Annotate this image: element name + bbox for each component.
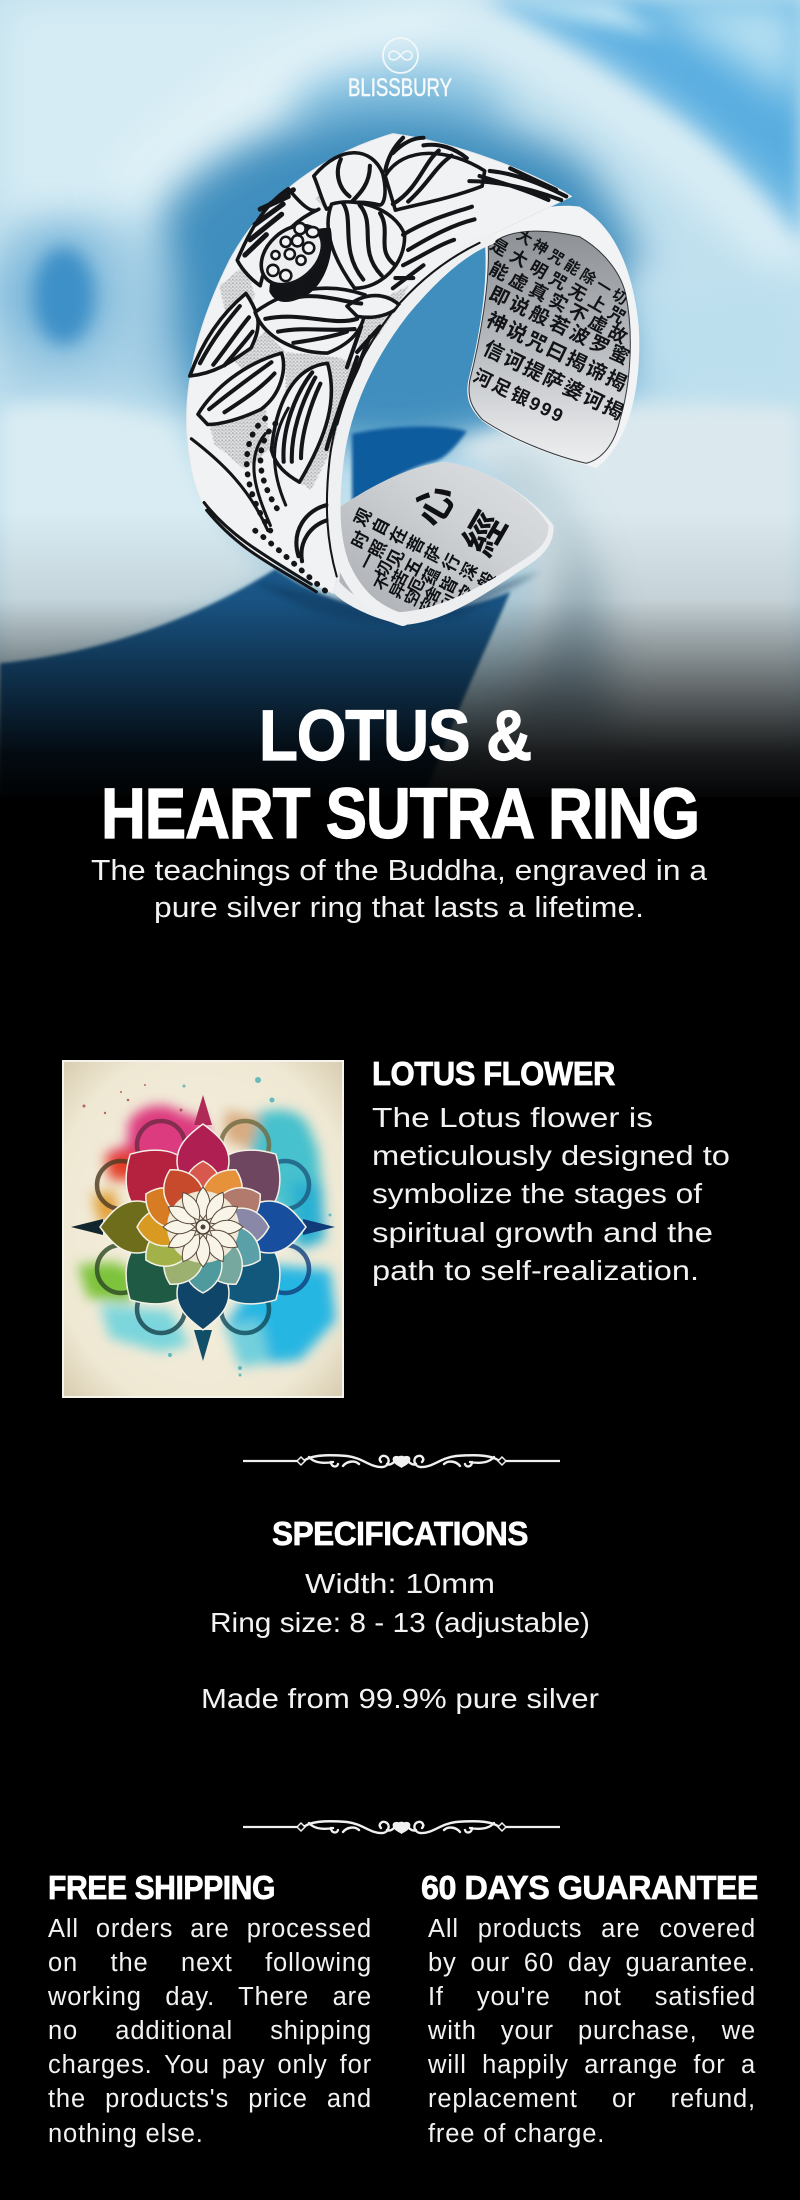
- guarantee text: replacement or refund,: [428, 2085, 756, 2113]
- mandala petals: [100, 1124, 306, 1330]
- guarantee text: will happily arrange for a: [428, 2051, 756, 2079]
- free shipping text: nothing else.: [48, 2120, 204, 2148]
- guarantee text: If you're not satisfied: [428, 1983, 756, 2011]
- lotus flower description: path to self-realization.: [372, 1255, 699, 1286]
- subtitle: The teachings of the Buddha, engraved in a: [91, 855, 708, 887]
- guarantee text: with your purchase, we: [428, 2017, 756, 2045]
- ring bottom tab with engraved characters: 时照见五蕴皆空度: [346, 525, 500, 619]
- free shipping text: charges. You pay only for: [48, 2051, 372, 2079]
- guarantee heading: 60 DAYS GUARANTEE: [421, 1869, 758, 1906]
- lotus flower petals: [190, 153, 485, 482]
- logo: Blissbury: [348, 38, 452, 102]
- lotus mandala watercolor picture: [62, 1060, 344, 1398]
- specifications list: Ring size: 8 - 13 (adjustable): [210, 1607, 590, 1638]
- lotus flower heading: LOTUS FLOWER: [372, 1055, 616, 1092]
- seed pod: [250, 214, 334, 302]
- ornamental divider: [243, 1455, 560, 1468]
- mandala picture frame: [63, 1061, 343, 1397]
- hero photo: blue draped cloth background: [0, 0, 800, 806]
- ring bottom tab with engraved characters: 心經: [401, 468, 531, 578]
- free shipping text: [48, 1915, 372, 2148]
- ring inner face with engraved sutra: 即说般若波罗蜜: [486, 282, 633, 370]
- lotus flower description: meticulously designed to: [372, 1140, 730, 1171]
- title: [101, 697, 699, 854]
- outer ink spikes: [71, 1095, 335, 1361]
- free shipping text: no additional shipping: [48, 2017, 372, 2045]
- ring bottom tab with engraved characters: 观自在菩萨行深般若: [349, 502, 520, 606]
- free shipping text: the products's price and: [48, 2085, 372, 2113]
- guarantee text: [428, 1915, 756, 2148]
- paint spatter: [82, 1084, 182, 1114]
- ring outer band: [187, 134, 571, 593]
- ring inner face with engraved sutra: 是大明咒无上咒: [487, 234, 629, 328]
- engraved stipple shading: [209, 172, 408, 490]
- logo: Blissbury: BLISSBURY: [348, 74, 452, 102]
- specifications list: Width: 10mm: [305, 1568, 495, 1599]
- ring inner face with engraved sutra: 能虚真实不虚故: [486, 257, 631, 348]
- ring soft contact shadow: [255, 571, 541, 624]
- lotus flower description: spiritual growth and the: [372, 1217, 713, 1248]
- subtitle: pure silver ring that lasts a lifetime.: [154, 892, 644, 924]
- lotus flower description: [372, 1102, 730, 1286]
- specifications list: [201, 1568, 599, 1714]
- title: HEART SUTRA RING: [101, 775, 699, 854]
- ring inner face with engraved sutra: 神说咒曰揭谛揭: [482, 308, 630, 396]
- free shipping text: on the next following: [48, 1949, 372, 1977]
- free shipping heading: FREE SHIPPING: [48, 1869, 275, 1906]
- ring inner face with engraved sutra: 信诃提萨婆诃揭: [479, 337, 627, 425]
- dotted stem: [247, 418, 327, 592]
- ring inner face with engraved sutra: 河足银999: [470, 365, 567, 426]
- ring inner face with engraved sutra: [467, 206, 639, 468]
- subtitle: [91, 855, 708, 924]
- hero ring product illustration: [187, 134, 639, 642]
- guarantee text: by our 60 day guarantee.: [428, 1949, 756, 1977]
- black page background: [0, 797, 800, 2200]
- outer ink rings: [97, 1121, 309, 1333]
- guarantee text: free of charge.: [428, 2120, 605, 2148]
- ring bottom tab with engraved characters: 不异空空不异色: [370, 569, 485, 642]
- watercolor splashes: [78, 1106, 336, 1368]
- lotus flower description: symbolize the stages of: [372, 1178, 702, 1209]
- title: LOTUS &: [259, 697, 531, 776]
- ring bottom tab with engraved characters: 一切苦厄舍利子色: [354, 546, 496, 635]
- lotus flower description: The Lotus flower is: [372, 1102, 653, 1133]
- engraved petal lines: [191, 138, 566, 592]
- specifications list: Made from 99.9% pure silver: [201, 1683, 599, 1714]
- free shipping text: All orders are processed: [48, 1915, 372, 1943]
- free shipping text: working day. There are: [48, 1983, 372, 2011]
- ring inner rim highlight: [327, 239, 490, 620]
- ring bottom tab with engraved characters: [333, 462, 554, 642]
- ring inner face with engraved sutra: 大神咒能除一切: [513, 226, 631, 309]
- ornamental divider: [243, 1821, 560, 1834]
- guarantee text: All products are covered: [428, 1915, 756, 1943]
- specifications heading: SPECIFICATIONS: [272, 1515, 528, 1552]
